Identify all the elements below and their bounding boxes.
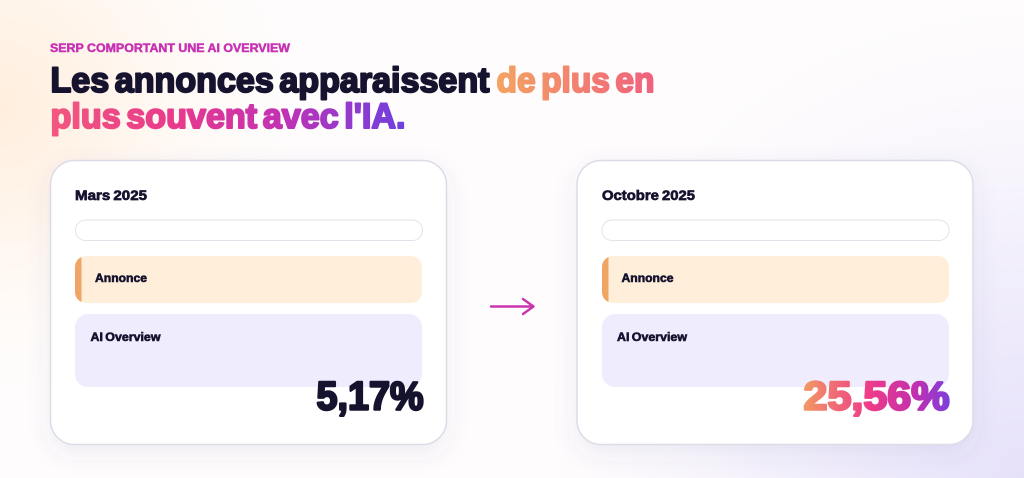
title bbox=[50, 61, 654, 136]
AI Overview block bbox=[75, 314, 422, 387]
panel heading: Mars 2025: Mars 2025 bbox=[75, 187, 147, 203]
ad block bbox=[602, 256, 949, 303]
ad block bbox=[75, 256, 422, 303]
AI Overview block: AI Overview bbox=[90, 332, 161, 344]
statistic: 25,56%: 25,56% bbox=[804, 374, 950, 418]
eyebrow label: SERP COMPORTANT UNE AI OVERVIEW bbox=[50, 43, 290, 55]
ad block: Annonce bbox=[95, 273, 147, 285]
ad block: Annonce bbox=[622, 273, 674, 285]
panel heading: Octobre 2025: Octobre 2025 bbox=[602, 187, 695, 203]
AI Overview block bbox=[602, 314, 949, 387]
title: de plus en bbox=[496, 61, 654, 100]
search bar bbox=[602, 220, 949, 240]
title: plus souvent avec l'IA. bbox=[50, 97, 406, 136]
panel: Mars 2025 bbox=[50, 160, 446, 444]
statistic: 5,17%: 5,17% bbox=[316, 374, 424, 418]
AI Overview block: AI Overview bbox=[617, 332, 687, 344]
arrow bbox=[491, 299, 534, 314]
panel: Octobre 2025 bbox=[577, 160, 973, 444]
title: Les annonces apparaissent bbox=[50, 61, 490, 100]
search bar bbox=[76, 220, 422, 240]
